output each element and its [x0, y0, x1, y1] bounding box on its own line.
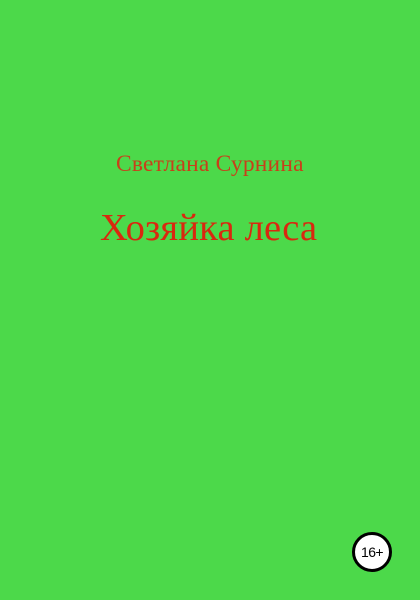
author name: Светлана Сурнина [116, 151, 304, 177]
age rating badge [352, 532, 392, 572]
age rating badge: 16+ [361, 544, 383, 560]
title: Хозяйка леса [100, 207, 317, 249]
